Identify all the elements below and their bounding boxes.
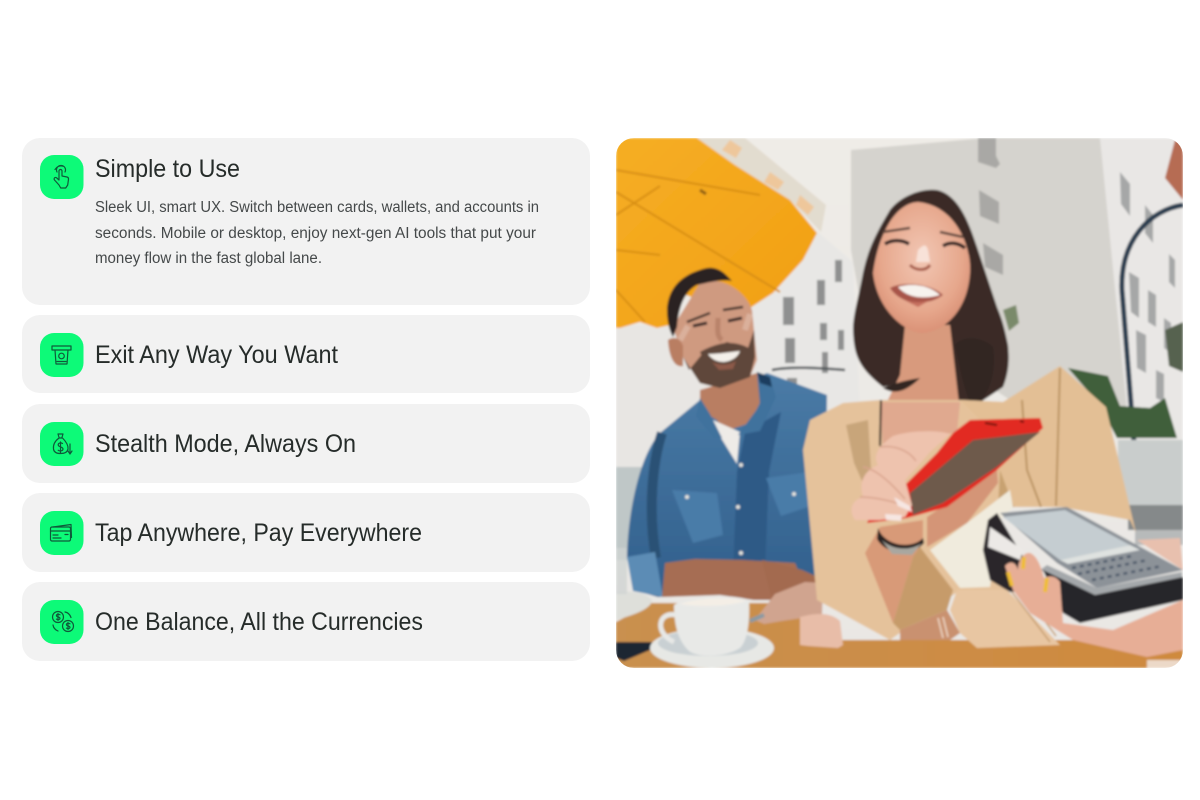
panel: Tap Anywhere, Pay Everywhere [22,493,590,572]
heading: Exit Any Way You Want: Exit Any Way You Want [95,341,338,369]
woman with phone [800,190,1136,648]
icon: cash withdrawal [40,333,84,377]
umbrella [616,138,826,328]
heading: Simple to Use: Simple to Use [95,155,240,183]
coffee cup and saucers [616,548,774,668]
text block: description: seconds. Mobile or desktop, enjoy next-gen AI tools that put your [95,225,536,242]
heading: One Balance, All the Currencies: One Balance, All the Currencies [95,608,423,636]
panel: Stealth Mode, Always On [22,404,590,483]
man in denim shirt [627,268,827,624]
text block: description: money flow in the fast global lane. [95,250,322,267]
panel: Simple to Use [22,138,590,305]
icon: money bag [40,422,84,466]
icon: tapping hand [40,155,84,199]
photo: couple paying by phone at a cafe [616,138,1183,668]
heading: Tap Anywhere, Pay Everywhere: Tap Anywhere, Pay Everywhere [95,519,422,547]
wooden table [616,603,1183,668]
panel: Exit Any Way You Want [22,315,590,393]
text block: description: Sleek UI, smart UX. Switch between cards, wallets, and accounts in [95,199,539,216]
payment terminal and hand [983,507,1183,668]
icon: currency exchange coins [40,600,84,644]
heading: Stealth Mode, Always On: Stealth Mode, Always On [95,430,356,458]
text block: description [95,199,539,267]
sky background [616,138,1183,668]
buildings and street background [616,138,1183,560]
panel: One Balance, All the Currencies [22,582,590,661]
icon: payment card [40,511,84,555]
